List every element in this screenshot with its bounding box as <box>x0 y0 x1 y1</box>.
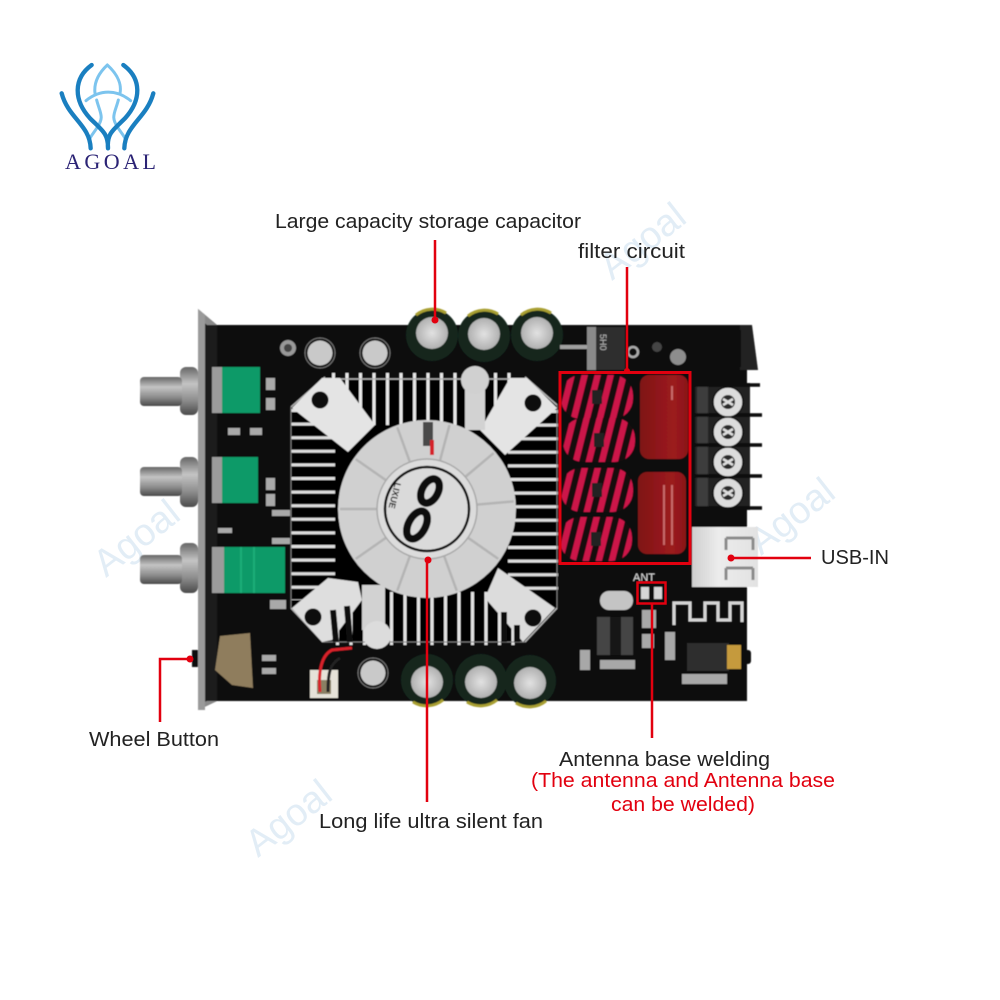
ANT silkscreen: ANT <box>633 572 655 584</box>
filter inductors <box>536 375 659 561</box>
watermark text: Agoal <box>86 492 188 585</box>
speaker terminal block <box>692 383 762 510</box>
heatsink <box>291 377 557 642</box>
watermark text: Agoal <box>592 195 694 288</box>
callout: fan leader <box>424 556 432 802</box>
small parts left <box>218 378 290 674</box>
front panel <box>192 309 217 710</box>
fan hub logo <box>377 459 477 559</box>
label: wheel button: Wheel Button <box>89 729 219 751</box>
label: antenna base <box>531 749 835 816</box>
callout: storage capacitor leader <box>432 240 438 324</box>
amplifier board photo <box>140 309 762 710</box>
watermark text: Agoal <box>741 470 843 563</box>
volume and tone knobs <box>140 367 198 593</box>
label: antenna base: can be welded) <box>611 794 755 816</box>
diode <box>560 327 662 370</box>
logo: AGOAL <box>62 65 156 174</box>
callout: antenna base box and leader <box>638 582 666 738</box>
large storage capacitors <box>401 309 563 707</box>
fan power connector <box>310 648 352 698</box>
circuit board base <box>205 325 747 701</box>
icon: lotus hands emblem <box>62 65 153 148</box>
watermark text <box>86 195 843 865</box>
label: filter circuit: filter circuit <box>578 241 685 263</box>
callout: USB leader <box>728 554 811 562</box>
Bluetooth section <box>580 572 751 684</box>
chip <box>597 617 633 655</box>
watermark text: Agoal <box>238 772 340 865</box>
wheel button switch <box>215 633 253 688</box>
crystal <box>600 591 633 610</box>
label: antenna base: Antenna base welding <box>559 749 770 771</box>
audio jack <box>687 643 751 671</box>
label: USB-IN: USB-IN <box>821 547 889 569</box>
PCB antenna <box>674 603 742 625</box>
DC power jack <box>670 325 758 370</box>
filter film capacitors <box>638 375 688 554</box>
antenna pads <box>641 587 662 599</box>
cooling fan <box>338 420 516 598</box>
callout: wheel button leader <box>160 656 194 722</box>
logo wordmark: AGOAL <box>65 149 156 174</box>
USB socket <box>692 527 758 587</box>
label: fan: Long life ultra silent fan <box>319 811 543 833</box>
heading: storage capacitor label: Large capacity storage capacitor <box>275 211 581 233</box>
heatsink posts <box>362 366 489 649</box>
small electrolytic capacitors <box>305 338 390 688</box>
small components <box>580 610 727 684</box>
potentiometers <box>212 367 285 593</box>
diode: 5H0 <box>598 334 608 351</box>
callout: filter circuit box and leader <box>560 267 690 564</box>
fan hub logo: LIXUE <box>387 482 403 510</box>
mounting hole <box>280 340 296 356</box>
label: antenna base: (The antenna and Antenna base <box>531 770 835 792</box>
